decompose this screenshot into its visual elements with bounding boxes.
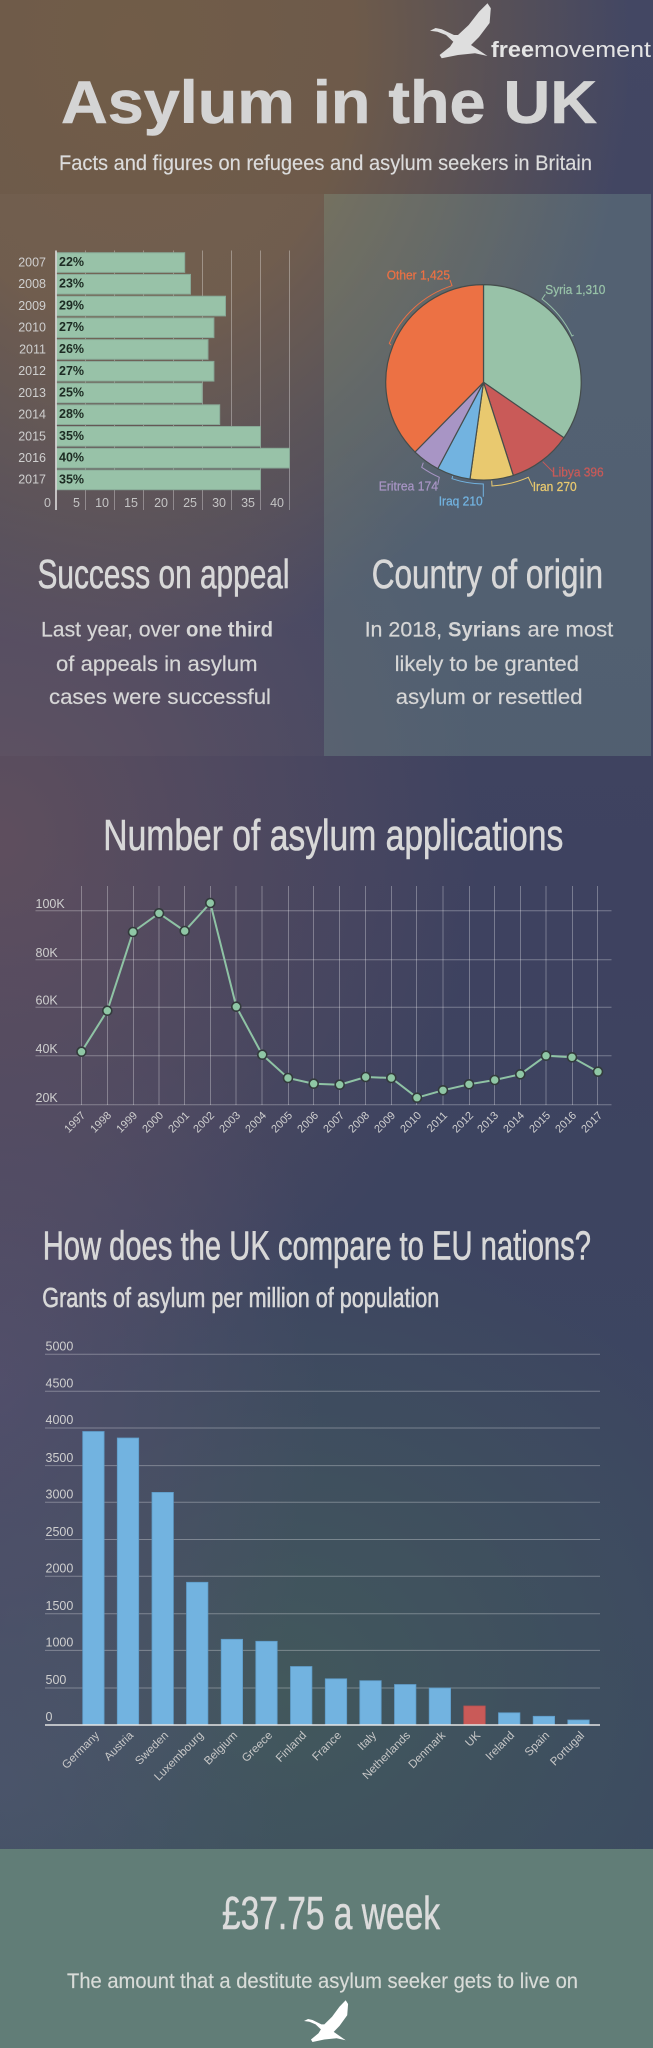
bar chart: success on appeal by year: 22% <box>59 255 84 269</box>
line chart: asylum applications 1997-2017: 2012 <box>450 1110 476 1135</box>
bar chart: grants of asylum per million of population: 2000 <box>46 1561 73 1575</box>
line chart: asylum applications 1997-2017: 60K <box>36 994 58 1008</box>
line chart: asylum applications 1997-2017: 2009 <box>372 1110 398 1135</box>
bar chart: grants of asylum per million of population: France <box>310 1730 344 1763</box>
bar chart: success on appeal by year: 30 <box>212 496 226 510</box>
text block: country of origin: Syrians <box>448 619 521 642</box>
bar chart: grants of asylum per million of population: Finland <box>274 1730 309 1765</box>
logo: free movement goose and wordmark: movement <box>534 37 651 62</box>
bar chart: success on appeal by year: 0 <box>44 496 51 510</box>
logo: free movement goose and wordmark <box>430 3 651 62</box>
line chart: asylum applications 1997-2017: 2002 <box>191 1110 217 1135</box>
panel: footer weekly amount <box>0 1849 653 2048</box>
text block: appeal success: of appeals in asylum <box>56 653 258 676</box>
panel: country of origin <box>324 194 651 756</box>
panel: success on appeal <box>0 194 324 756</box>
bar chart: grants of asylum per million of population: Sweden <box>133 1730 171 1768</box>
line chart: asylum applications 1997-2017: 2004 <box>243 1110 269 1135</box>
bar chart: grants of asylum per million of population: Portugal <box>548 1730 587 1768</box>
bar chart: success on appeal by year: 2016 <box>18 451 46 465</box>
line chart: asylum applications 1997-2017: 2011 <box>425 1110 450 1135</box>
bar chart: success on appeal by year: 40 <box>270 496 284 510</box>
line chart: asylum applications 1997-2017: 2001 <box>166 1110 192 1135</box>
pie chart: country of origin: Iran 270 <box>533 479 577 494</box>
line chart: asylum applications 1997-2017: 2003 <box>217 1110 243 1135</box>
bar chart: success on appeal by year: 29% <box>59 298 84 312</box>
bar chart: grants of asylum per million of population: 1500 <box>46 1599 73 1613</box>
bar chart: grants of asylum per million of population <box>45 1339 600 1783</box>
bar chart: grants of asylum per million of population: Germany <box>60 1729 102 1772</box>
heading: success on appeal: Success on appeal <box>38 551 290 597</box>
text block: appeal success: one third <box>186 619 273 642</box>
bar chart: grants of asylum per million of population: 3000 <box>46 1488 73 1502</box>
bar chart: success on appeal by year: 2013 <box>18 386 46 400</box>
bar chart: success on appeal by year: 2009 <box>18 299 46 313</box>
line chart: asylum applications 1997-2017: 1999 <box>114 1110 140 1135</box>
bar chart: success on appeal by year: 2014 <box>18 408 46 422</box>
text block: appeal success: cases were successful <box>49 686 271 709</box>
bar chart: success on appeal by year: 15 <box>124 496 138 510</box>
text block: country of origin: asylum or resettled <box>396 686 582 709</box>
bar chart: grants of asylum per million of population: Belgium <box>202 1730 240 1768</box>
text block: appeal success <box>41 619 273 709</box>
bar chart: success on appeal by year: 2017 <box>18 472 46 486</box>
text block: country of origin: likely to be granted <box>395 653 579 676</box>
bar chart: success on appeal by year: 26% <box>59 342 84 356</box>
text block: country of origin: In 2018, <box>365 619 442 642</box>
bar chart: success on appeal by year <box>18 250 290 510</box>
pie chart: country of origin: Eritrea 174 <box>379 479 438 494</box>
bar chart: success on appeal by year: 2011 <box>19 342 46 356</box>
bar chart: success on appeal by year: 2015 <box>18 430 46 444</box>
bar chart: grants of asylum per million of population: Austria <box>102 1729 137 1763</box>
line chart: asylum applications 1997-2017: 2005 <box>269 1110 295 1135</box>
bar chart: success on appeal by year: 2010 <box>18 320 46 334</box>
bar chart: success on appeal by year: 35% <box>59 429 84 443</box>
line chart: asylum applications 1997-2017: 20K <box>36 1091 58 1105</box>
bar chart: success on appeal by year: 35% <box>59 472 84 486</box>
text block: appeal success: Last year, over <box>41 619 180 642</box>
bar chart: grants of asylum per million of population: 0 <box>46 1710 52 1724</box>
pie chart: country of origin: Syria 1,310 <box>545 282 605 297</box>
line chart: asylum applications 1997-2017: 2006 <box>295 1110 321 1135</box>
bar chart: success on appeal by year: 25% <box>59 386 84 400</box>
bar chart: grants of asylum per million of population: 4000 <box>46 1413 73 1427</box>
bar chart: grants of asylum per million of population: UK <box>463 1729 483 1749</box>
line chart: asylum applications 1997-2017: 2010 <box>398 1110 424 1135</box>
line chart: asylum applications 1997-2017: 2017 <box>579 1110 605 1135</box>
subtitle: Facts and figures on refugees and asylum seekers in Britain <box>59 152 592 175</box>
line chart: asylum applications 1997-2017: 1998 <box>88 1110 114 1135</box>
line chart: asylum applications 1997-2017: 1997 <box>62 1110 88 1135</box>
text block: country of origin: are most <box>528 619 613 642</box>
bar chart: success on appeal by year: 28% <box>59 407 84 421</box>
line chart: asylum applications 1997-2017: 80K <box>36 946 58 960</box>
bar chart: grants of asylum per million of population: 3500 <box>46 1451 73 1465</box>
line chart: asylum applications 1997-2017: 2007 <box>321 1110 347 1135</box>
bar chart: grants of asylum per million of population: Ireland <box>484 1730 517 1763</box>
bar chart: success on appeal by year: 10 <box>95 496 109 510</box>
bar chart: success on appeal by year: 27% <box>59 320 84 334</box>
bar chart: grants of asylum per million of population: Greece <box>240 1730 275 1765</box>
title: Asylum in the UK <box>61 69 597 136</box>
bar chart: grants of asylum per million of population: Spain <box>523 1730 552 1759</box>
bar chart: grants of asylum per million of population: Netherlands <box>361 1729 413 1782</box>
bar chart: grants of asylum per million of population: 5000 <box>46 1339 73 1353</box>
subheading: grants per million: Grants of asylum per million of population <box>42 1282 439 1313</box>
bar chart: success on appeal by year: 2012 <box>18 364 46 378</box>
text block: country of origin <box>365 619 613 709</box>
line chart: asylum applications 1997-2017: 2008 <box>346 1110 372 1135</box>
heading: weekly amount: £37.75 a week <box>222 1887 441 1939</box>
text block: weekly amount description: The amount that a destitute asylum seeker gets to live on <box>67 1970 578 1993</box>
bar chart: grants of asylum per million of population: Denmark <box>407 1729 448 1771</box>
pie chart: country of origin: Libya 396 <box>552 465 604 480</box>
bar chart: success on appeal by year: 25 <box>183 496 197 510</box>
pie chart: country of origin: Other 1,425 <box>387 267 450 282</box>
line chart: asylum applications 1997-2017: 2015 <box>527 1110 553 1135</box>
bar chart: grants of asylum per million of population: 1000 <box>46 1636 73 1650</box>
line chart: asylum applications 1997-2017: 2016 <box>553 1110 579 1135</box>
pie chart: country of origin <box>379 267 605 508</box>
bar chart: success on appeal by year: 20 <box>154 496 168 510</box>
line chart: asylum applications 1997-2017: 100K <box>36 897 65 911</box>
bar chart: success on appeal by year: 2007 <box>18 256 46 270</box>
line chart: asylum applications 1997-2017: 2014 <box>501 1110 527 1135</box>
bar chart: success on appeal by year: 40% <box>59 450 84 464</box>
line chart: asylum applications 1997-2017: 2013 <box>475 1110 501 1135</box>
bar chart: grants of asylum per million of population: Luxembourg <box>152 1730 206 1783</box>
bar chart: success on appeal by year: 27% <box>59 364 84 378</box>
bar chart: grants of asylum per million of population: 500 <box>46 1673 66 1687</box>
icon: goose <box>304 2000 348 2042</box>
bar chart: success on appeal by year: 2008 <box>18 277 46 291</box>
bar chart: success on appeal by year: 35 <box>241 496 255 510</box>
bar chart: success on appeal by year: 23% <box>59 276 84 290</box>
line chart: asylum applications 1997-2017: 40K <box>36 1042 58 1056</box>
bar chart: success on appeal by year: 5 <box>73 496 80 510</box>
line chart: asylum applications 1997-2017: 2000 <box>140 1110 166 1135</box>
bar chart: grants of asylum per million of population: Italy <box>356 1729 379 1753</box>
logo: free movement goose and wordmark: free <box>491 37 534 62</box>
line chart: asylum applications 1997-2017 <box>36 886 612 1135</box>
pie chart: country of origin: Iraq 210 <box>439 493 483 508</box>
bar chart: grants of asylum per million of population: 2500 <box>46 1525 73 1539</box>
bar chart: grants of asylum per million of population: 4500 <box>46 1376 73 1390</box>
